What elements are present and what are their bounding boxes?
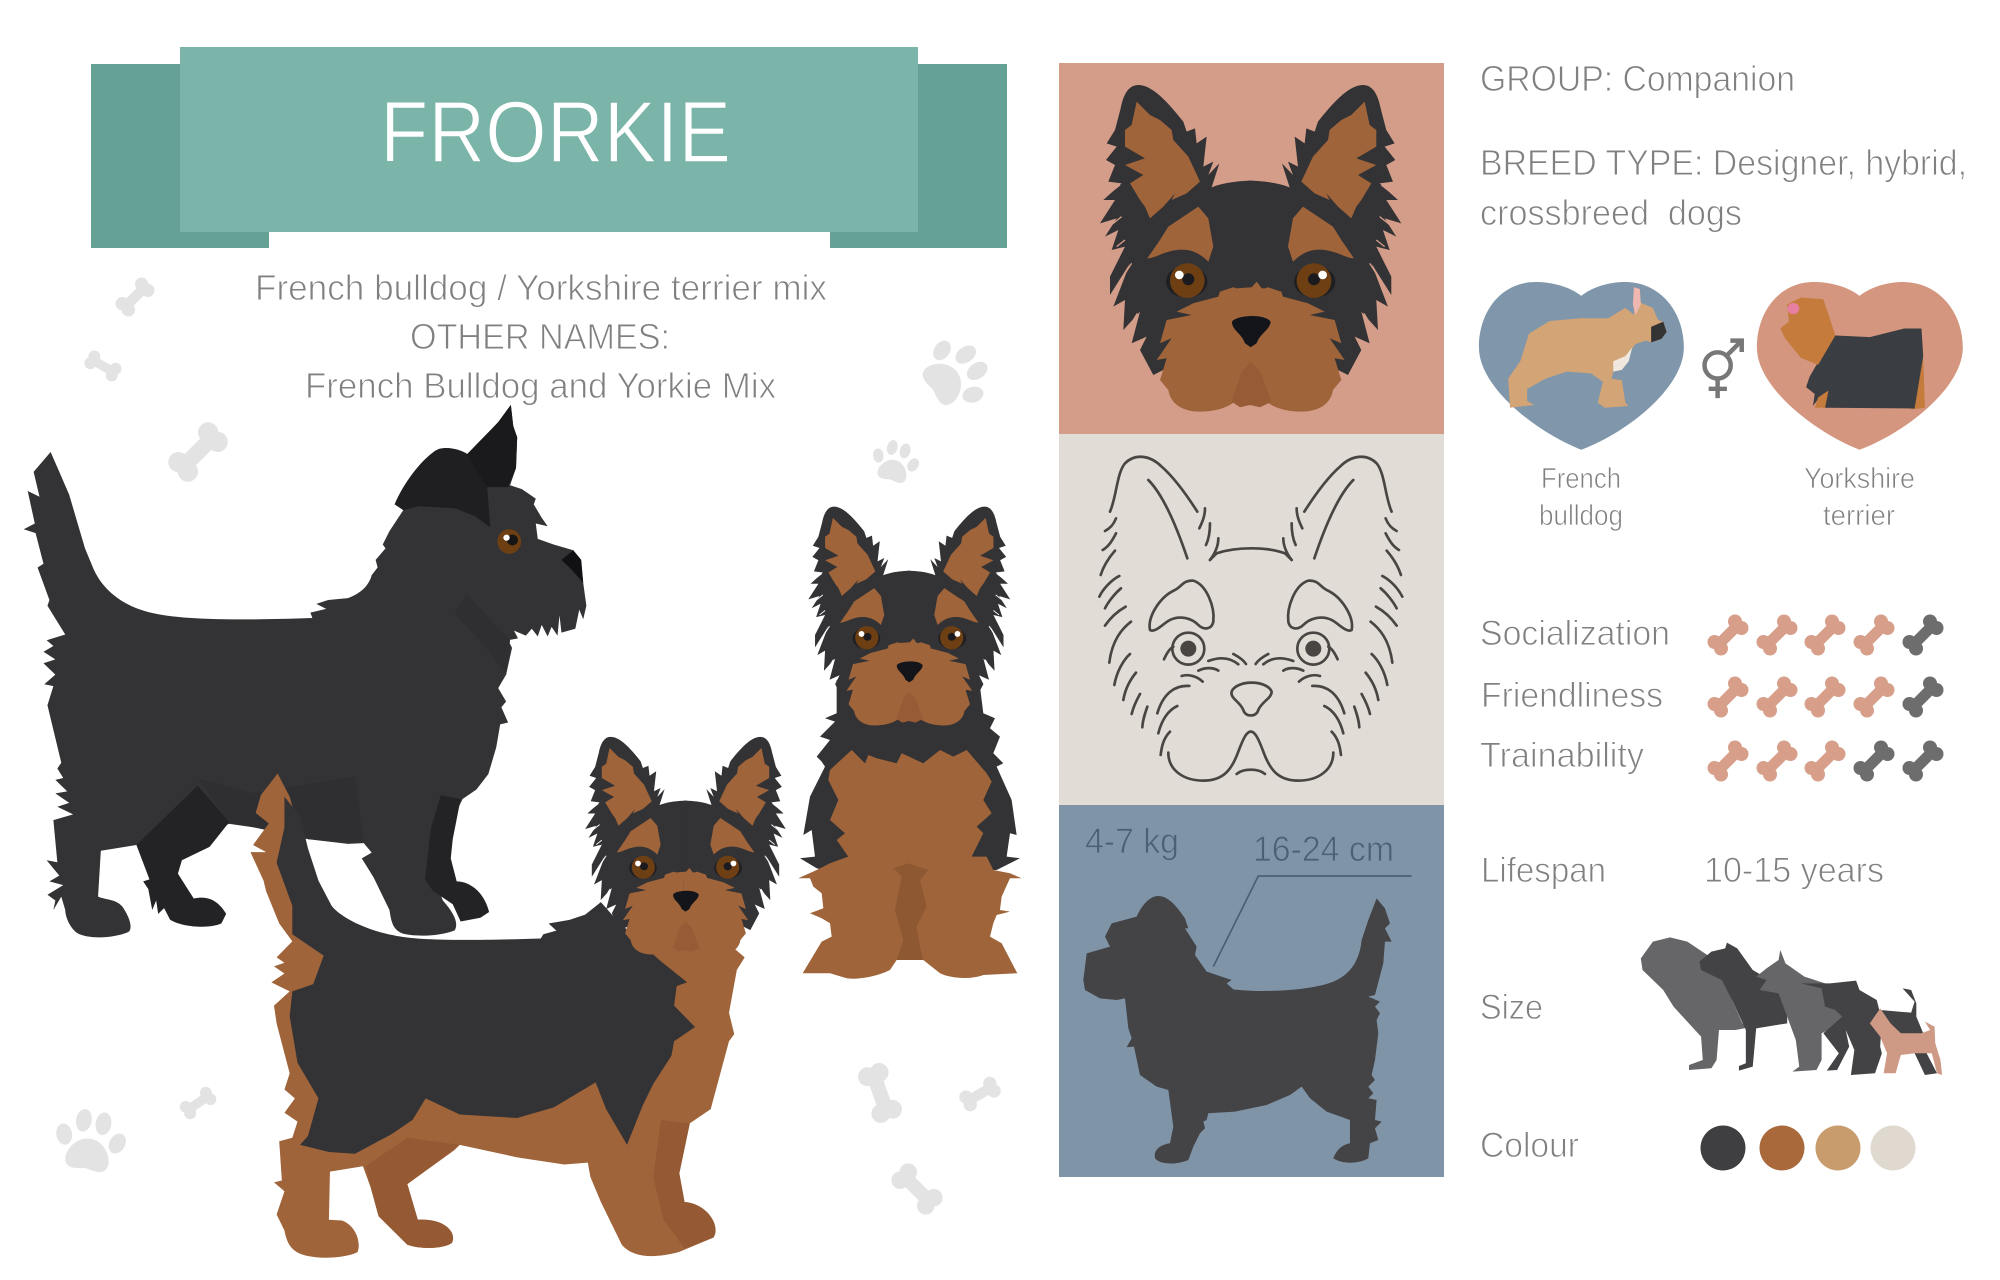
height leader line (1213, 876, 1412, 967)
panel: size silhouette (1059, 805, 1444, 1177)
parent breed labels: terrier (1823, 500, 1895, 532)
weight label: 4-7 kg (1085, 822, 1179, 861)
lifespan: Lifespan (1481, 851, 1606, 890)
black dog standing (24, 405, 586, 937)
subtitle text block: French bulldog / Yorkshire terrier mix (255, 267, 827, 308)
Trainability row (1480, 736, 1944, 782)
parent breed labels: Yorkshire (1804, 463, 1915, 495)
size comparison: Size (1480, 988, 1543, 1027)
colour swatches (1480, 1126, 1916, 1170)
lifespan: 10-15 years (1704, 851, 1884, 890)
heart: Yorkshire terrier (1757, 282, 1963, 450)
panel: face portrait (1059, 63, 1444, 434)
parent breed labels (1539, 463, 1915, 532)
panel: line art face (1059, 434, 1444, 805)
ratings (1480, 614, 1944, 782)
colour swatches: Colour (1480, 1126, 1579, 1165)
breed facts text: BREED TYPE: Designer, hybrid, (1480, 142, 1967, 183)
Trainability row: Trainability (1480, 736, 1644, 775)
sitting puppy (798, 507, 1022, 979)
background bones and paws (48, 278, 1004, 1215)
height label: 16-24 cm (1253, 830, 1394, 869)
size comparison (1480, 937, 1942, 1075)
subtitle text block: OTHER NAMES: (410, 316, 670, 357)
breed facts text: GROUP: Companion (1480, 58, 1795, 99)
subtitle text block (255, 267, 827, 406)
dog size silhouettes (1641, 937, 1942, 1075)
breed facts text (1480, 58, 1967, 233)
icon: outline dog face (1099, 457, 1402, 781)
Socialization row (1480, 614, 1944, 656)
subtitle text block: French Bulldog and Yorkie Mix (305, 365, 776, 406)
heart: French bulldog (1479, 282, 1684, 450)
lifespan (1481, 851, 1884, 890)
Friendliness row: Friendliness (1481, 676, 1663, 715)
icon: male female symbol (1705, 341, 1742, 398)
parent breeds hearts (1479, 282, 1963, 450)
Socialization row: Socialization (1480, 614, 1670, 653)
parent breed labels: French (1541, 463, 1621, 495)
dog silhouette (1083, 876, 1412, 1164)
Friendliness row (1481, 676, 1944, 718)
icon: colour dog face (1100, 85, 1401, 412)
title: FRORKIE (380, 84, 731, 181)
banner ribbon (91, 47, 1007, 249)
breed facts text: crossbreed dogs (1480, 192, 1742, 233)
tan and black dog standing (250, 737, 786, 1258)
parent breed labels: bulldog (1539, 500, 1623, 532)
